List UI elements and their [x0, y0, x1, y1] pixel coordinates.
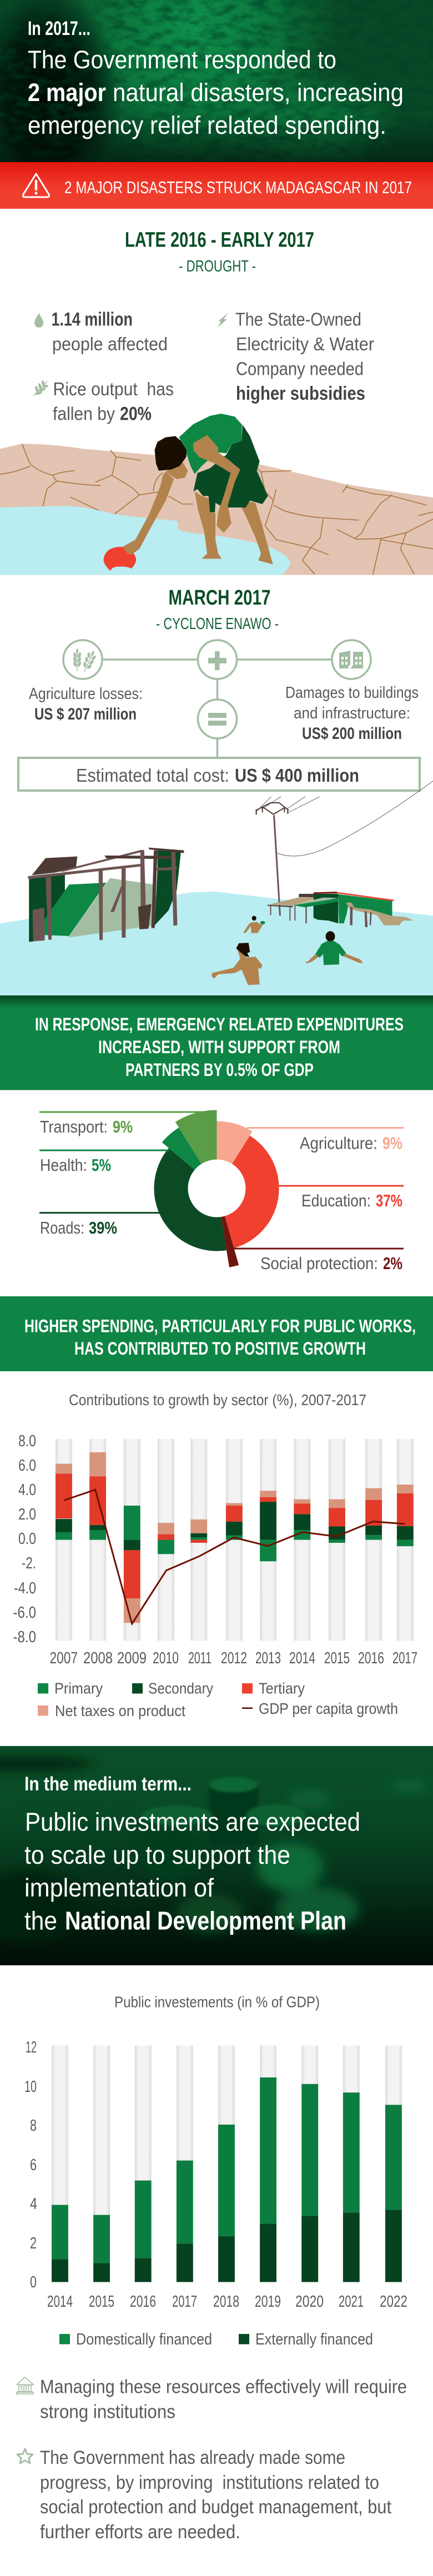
- label: roads: [39, 1212, 161, 1237]
- growth chart y axis labels: 6.0: [18, 1457, 36, 1475]
- closing point: institutions: [17, 2376, 407, 2423]
- label: social protection: Social protection:: [260, 1254, 378, 1273]
- growth chart y axis labels: 2.0: [18, 1506, 36, 1523]
- bar: 2016: [135, 2046, 152, 2282]
- growth chart y axis labels: 4.0: [18, 1481, 36, 1499]
- drought fact: people affected: people affected: [52, 334, 168, 354]
- investment chart y axis labels: 4: [30, 2195, 37, 2213]
- drought fact: rice output: 20%: [120, 403, 152, 424]
- illustration: woman collecting water on cracked land: [0, 414, 433, 575]
- growth chart x axis labels: 2012: [221, 1649, 247, 1667]
- icon: equals circle: [198, 700, 236, 738]
- cost diagram connectors: [83, 660, 351, 758]
- illustration: flooded village: [0, 781, 433, 995]
- label: education: [278, 1185, 404, 1210]
- bar: 2007: [56, 1439, 72, 1641]
- medium term text: National Development Plan: [65, 1906, 346, 1935]
- header title text: 2 major: [28, 78, 106, 107]
- agriculture losses text: US $ 207 million: [34, 705, 137, 723]
- growth chart x axis labels: 2011: [188, 1649, 212, 1667]
- label: social protection: 2%: [383, 1254, 402, 1273]
- closing point: government progress: further efforts are needed.: [40, 2522, 240, 2543]
- bar: 2012: [226, 1439, 243, 1641]
- segment: education: [216, 1136, 279, 1248]
- icon: water drop: [34, 313, 43, 328]
- investment chart x axis labels: [47, 2293, 407, 2311]
- investment chart x axis labels: 2015: [89, 2293, 114, 2311]
- growth chart x axis labels: 2017: [392, 1649, 417, 1667]
- icon: star: [17, 2449, 33, 2463]
- bar: 2015: [93, 2046, 110, 2282]
- growth chart legend: Net taxes on product: [55, 1702, 185, 1719]
- closing point: institutions: strong institutions: [40, 2402, 175, 2423]
- drought heading: - DROUGHT -: [179, 258, 256, 275]
- icon: institution building: [17, 2377, 33, 2394]
- investment chart x axis labels: 2014: [47, 2293, 73, 2311]
- label: roads: Roads:: [40, 1218, 84, 1237]
- cyclone heading: MARCH 2017: [169, 586, 271, 610]
- header title text: natural disasters, increasing: [113, 78, 404, 107]
- cracked land: [0, 444, 433, 575]
- icon: warning triangle: [23, 174, 49, 197]
- growth chart y axis labels: -4.0: [14, 1579, 36, 1597]
- drought fact: people affected: 1.14 million: [51, 309, 133, 330]
- investment chart y axis labels: 6: [30, 2156, 37, 2174]
- label: health: 5%: [92, 1155, 111, 1175]
- bar: 2019: [260, 2046, 276, 2282]
- label: agriculture: 9%: [382, 1134, 402, 1153]
- icon: damaged building circle: [332, 640, 371, 679]
- chart title: public investments: Public investements (in % of GDP): [114, 1993, 320, 2011]
- icon: agriculture circle: [63, 640, 102, 679]
- label: transport: [39, 1111, 216, 1136]
- investment chart legend: Domestically financed: [76, 2331, 212, 2348]
- utility pole and wires: [255, 781, 433, 915]
- stacked bar chart: public investment financing: [52, 2046, 402, 2282]
- growth chart legend: GDP per capita growth: [259, 1700, 398, 1717]
- drought fact: rice output: fallen by: [53, 403, 115, 424]
- total cost box: [18, 758, 420, 791]
- investment chart y axis labels: 0: [30, 2273, 37, 2291]
- drought fact: people affected: [34, 309, 168, 354]
- growth chart y axis labels: -8.0: [13, 1628, 36, 1646]
- closing point: government progress: The Government has already made some: [40, 2447, 345, 2468]
- drought fact: subsidies: Company needed: [236, 359, 364, 379]
- drought fact: subsidies: Electricity & Water: [236, 334, 374, 354]
- segment: health: [162, 1128, 216, 1188]
- growth chart x axis labels: 2014: [289, 1649, 315, 1667]
- bar: 2011: [190, 1439, 207, 1641]
- bar: 2017: [177, 2046, 193, 2282]
- building damages text: and infrastructure:: [294, 705, 410, 722]
- red bowl: [104, 547, 136, 571]
- flooded green house: [268, 892, 414, 927]
- bar: 2016: [365, 1439, 382, 1641]
- medium term text: [24, 1773, 360, 1935]
- woman figure: [123, 414, 273, 565]
- investment chart x axis labels: 2019: [255, 2293, 281, 2311]
- drought fact: subsidies: The State-Owned: [235, 309, 361, 330]
- wading person in green shirt: [305, 931, 363, 965]
- bar: 2009: [124, 1439, 140, 1641]
- growth chart x axis labels: 2008: [83, 1649, 113, 1667]
- growth chart x axis labels: 2015: [324, 1649, 350, 1667]
- drought fact: subsidies: higher subsidies: [236, 383, 365, 404]
- agriculture losses text: Agriculture losses:: [29, 685, 143, 703]
- header title text: [28, 18, 404, 139]
- drought heading: LATE 2016 - EARLY 2017: [125, 229, 314, 252]
- flood water: [0, 892, 433, 995]
- header title text: emergency relief related spending.: [28, 111, 386, 139]
- bar: 2021: [343, 2046, 360, 2282]
- bar: 2014: [294, 1439, 310, 1641]
- investment chart x axis labels: 2018: [213, 2293, 239, 2311]
- person with ball: [243, 916, 265, 933]
- collapsed house: [28, 848, 184, 942]
- medium term text: In the medium term...: [24, 1773, 192, 1795]
- segment: roads: [154, 1148, 226, 1251]
- closing point: government progress: [17, 2447, 391, 2543]
- growth chart y axis labels: 0.0: [18, 1530, 36, 1548]
- dark panel with coin background: [0, 1746, 433, 1965]
- building damages text: US$ 200 million: [302, 724, 402, 743]
- label: health: Health:: [40, 1155, 87, 1175]
- header title text: In 2017...: [28, 18, 90, 39]
- investment chart x axis labels: 2020: [295, 2293, 324, 2311]
- label: social protection: [233, 1248, 404, 1273]
- icon: rice ear: [33, 380, 49, 396]
- growth chart x axis labels: 2009: [117, 1649, 147, 1667]
- growth chart x axis labels: 2013: [255, 1649, 281, 1667]
- investment chart y axis labels: [24, 2039, 37, 2291]
- growth chart x axis labels: [50, 1649, 417, 1667]
- label: education: 37%: [376, 1191, 402, 1210]
- bar: 2017: [397, 1439, 414, 1641]
- investment chart x axis labels: 2021: [339, 2293, 364, 2311]
- bar: 2020: [301, 2046, 318, 2282]
- line: GDP per capita growth: [64, 1490, 405, 1624]
- investment chart x axis labels: 2017: [172, 2293, 197, 2311]
- medium term text: to scale up to support the: [24, 1840, 290, 1869]
- drought fact: subsidies: [218, 309, 374, 404]
- wading woman: [212, 943, 263, 985]
- segment: agriculture: [216, 1121, 253, 1188]
- drought fact: rice output: Rice output has: [53, 379, 174, 399]
- growth chart legend: Primary: [54, 1680, 103, 1697]
- agriculture losses text: [29, 685, 143, 723]
- growth chart y axis labels: [13, 1432, 36, 1646]
- bar: 2018: [218, 2046, 235, 2282]
- investment chart x axis labels: 2022: [380, 2293, 407, 2311]
- growth chart y axis labels: -2.: [22, 1554, 36, 1572]
- label: roads: 39%: [89, 1218, 117, 1237]
- header title text: The Government responded to: [28, 46, 336, 74]
- growth chart x axis labels: 2016: [358, 1649, 384, 1667]
- cyclone heading: [156, 586, 279, 633]
- drought fact: rice output: [33, 379, 174, 424]
- banner: emergency expenditures: INCREASED, WITH SUPPORT FROM: [98, 1037, 340, 1057]
- building damages text: [285, 684, 419, 743]
- label: transport: Transport:: [40, 1117, 108, 1136]
- label: agriculture: Agriculture:: [300, 1134, 377, 1153]
- red alert band: [0, 162, 433, 209]
- banner: emergency expenditures: [0, 995, 433, 1090]
- closing point: government progress: social protection and budget management, but: [40, 2497, 391, 2518]
- chart title: contributions to growth: Contributions to growth by sector (%), 2007-2017: [69, 1391, 366, 1408]
- growth chart legend: Secondary: [148, 1680, 213, 1697]
- total cost box: Estimated total cost:: [76, 765, 229, 786]
- label: education: Education:: [301, 1191, 371, 1210]
- banner: positive growth: [0, 1296, 433, 1371]
- icon: plus circle: [198, 640, 236, 679]
- investment chart y axis labels: 10: [24, 2078, 37, 2096]
- medium term text: Public investments are expected: [25, 1808, 360, 1837]
- investment chart y axis labels: 12: [26, 2039, 37, 2056]
- bar: 2014: [52, 2046, 68, 2282]
- growth chart x axis labels: 2007: [50, 1649, 78, 1667]
- drought heading: [125, 229, 314, 275]
- investment chart y axis labels: 8: [30, 2117, 37, 2135]
- cyclone heading: - CYCLONE ENAWO -: [156, 615, 279, 633]
- donut chart: emergency spending by sector: [154, 1110, 279, 1267]
- total cost box: US $ 400 million: [235, 765, 359, 786]
- label: health: [39, 1149, 169, 1175]
- header panel with green satellite background: [0, 0, 433, 162]
- bar: 2022: [385, 2046, 402, 2282]
- stacked bar chart: contributions by sector: [56, 1439, 414, 1641]
- investment chart x axis labels: 2016: [130, 2293, 156, 2311]
- label: transport: 9%: [113, 1117, 133, 1136]
- banner: emergency expenditures: PARTNERS BY 0.5% OF GDP: [125, 1060, 314, 1080]
- bar: 2010: [158, 1439, 174, 1641]
- growth chart x axis labels: 2010: [153, 1649, 179, 1667]
- growth chart y axis labels: -6.0: [13, 1604, 36, 1622]
- closing point: government progress: progress, by improving institutions related to: [40, 2472, 379, 2493]
- bar: 2013: [260, 1439, 276, 1641]
- investment chart y axis labels: 2: [30, 2235, 37, 2252]
- segment: social protection: [216, 1188, 239, 1267]
- water pool: [0, 506, 290, 575]
- medium term text: implementation of: [24, 1873, 214, 1902]
- growth chart legend: Tertiary: [259, 1680, 305, 1697]
- investment chart legend: [59, 2331, 373, 2348]
- growth chart legend: [38, 1680, 398, 1719]
- investment chart legend: Externally financed: [255, 2331, 373, 2348]
- segment: transport: [175, 1110, 216, 1188]
- bar: 2015: [329, 1439, 345, 1641]
- bar: 2008: [89, 1439, 106, 1641]
- icon: lightning bolt: [218, 313, 228, 328]
- growth chart y axis labels: 8.0: [18, 1432, 36, 1450]
- medium term text: the: [24, 1906, 57, 1935]
- ground cracks: [0, 444, 433, 575]
- label: agriculture: [247, 1127, 404, 1153]
